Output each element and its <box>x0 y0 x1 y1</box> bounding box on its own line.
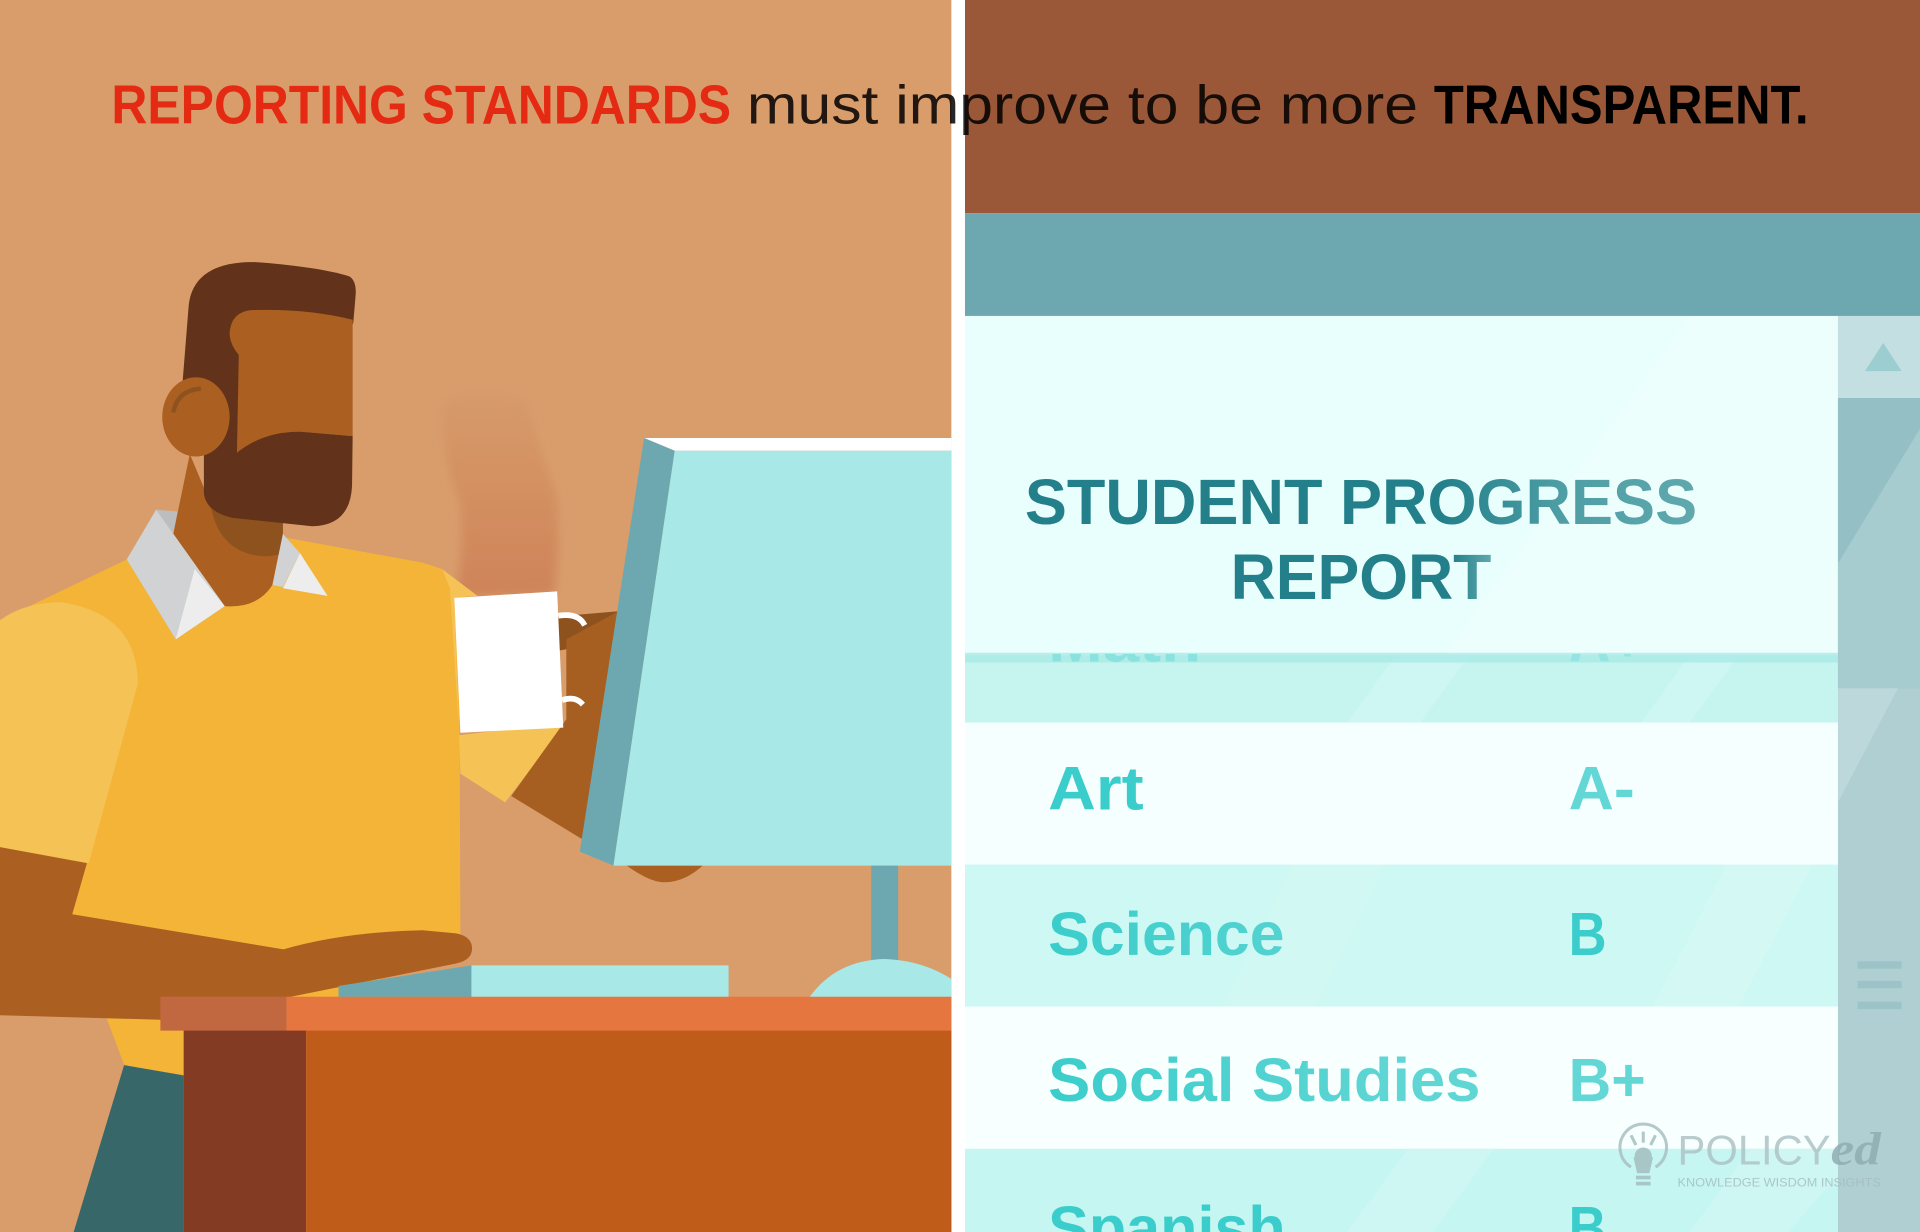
monitor <box>580 438 955 997</box>
row: Math (clipped) <box>1052 654 1631 662</box>
trousers <box>73 1064 184 1232</box>
logo: PolicyEd watermark: ed <box>1831 1125 1882 1176</box>
row: Spanish (clipped) <box>1052 1204 1603 1232</box>
row: Social Studies <box>1050 1056 1644 1102</box>
hair <box>182 262 356 454</box>
panel: left illustration <box>0 0 955 1232</box>
heading: student progress report: REPORT <box>1231 542 1492 613</box>
row: Art: A- <box>1569 754 1635 822</box>
neck <box>173 454 283 606</box>
title <box>111 74 1809 136</box>
ear <box>162 377 230 457</box>
logo: PolicyEd watermark: KNOWLEDGE WISDOM INSIGHTS <box>1678 1176 1881 1190</box>
shirt sleeve right <box>442 569 566 802</box>
coffee mug <box>454 591 585 733</box>
title: REPORTING STANDARDS <box>111 74 731 136</box>
left forearm and hand <box>0 847 472 1020</box>
row: Science <box>1050 910 1604 956</box>
row: Math (clipped): Math <box>1048 606 1201 674</box>
row: Science: Science <box>1048 900 1284 968</box>
row: Art <box>1050 767 1632 810</box>
row: Social Studies: Social Studies <box>1048 1046 1480 1114</box>
row: Math (clipped): A+ <box>1569 606 1644 674</box>
title: must improve to be more <box>747 74 1418 136</box>
heading: student progress report: STUDENT PROGRESS <box>1025 467 1697 538</box>
heading: student progress report <box>1026 479 1695 600</box>
shirt sleeve left <box>0 602 138 863</box>
teal window bar <box>965 213 1920 316</box>
scrollbar <box>1838 316 1920 1232</box>
hand under monitor <box>626 866 702 882</box>
collar right <box>272 534 328 596</box>
header divider strip <box>965 653 1838 663</box>
logo: PolicyEd watermark: POLICY <box>1678 1127 1831 1174</box>
face <box>230 310 353 453</box>
desk <box>160 997 955 1232</box>
neck shadow <box>211 508 283 556</box>
report header block <box>965 316 1838 654</box>
title: TRANSPARENT. <box>1434 74 1809 136</box>
wall band <box>965 0 1920 213</box>
collar left <box>127 510 225 639</box>
right forearm <box>511 611 618 839</box>
logo: PolicyEd watermark <box>1620 1124 1882 1190</box>
arm behind monitor <box>558 611 618 650</box>
row: Social Studies: B+ <box>1569 1046 1646 1114</box>
row: Science: B <box>1569 900 1607 968</box>
shirt body <box>0 537 460 1075</box>
panel: right report screen <box>965 0 1920 1232</box>
row: Art: Art <box>1048 754 1144 822</box>
steam rising from mug <box>451 442 559 597</box>
keyboard <box>339 965 729 997</box>
table rows <box>965 655 1838 1232</box>
beard <box>204 432 353 526</box>
